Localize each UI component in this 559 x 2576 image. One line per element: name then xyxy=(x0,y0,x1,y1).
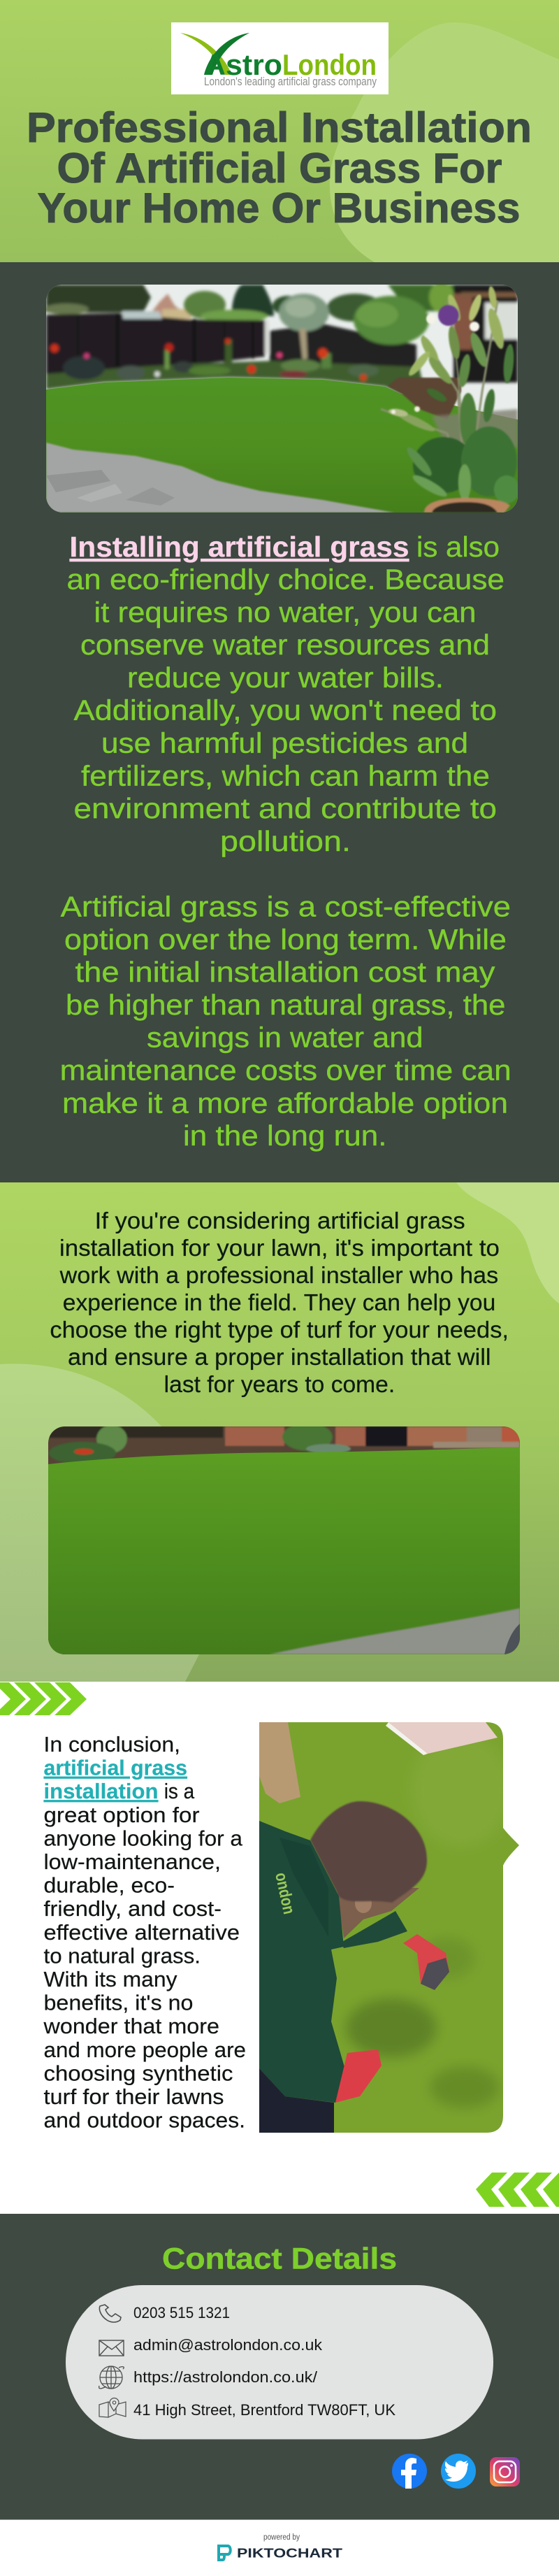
icon: instagram xyxy=(490,2457,520,2486)
text block: considering installation: experience in the field. They can help you xyxy=(63,1289,495,1315)
text: website: https://astrolondon.co.uk/ xyxy=(133,2368,318,2386)
text block: cost-effective: the initial installation cost may xyxy=(75,956,495,988)
footer: powered by Piktochart xyxy=(219,2533,342,2561)
header band xyxy=(0,0,559,262)
text block: conclusion: and outdoor spaces. xyxy=(43,2108,245,2133)
text block: eco-friendly choice xyxy=(67,531,504,857)
flower bed xyxy=(46,361,426,399)
icon: globe xyxy=(99,2366,124,2389)
footer: powered by Piktochart: powered by xyxy=(263,2533,300,2542)
icon: map xyxy=(99,2398,126,2417)
white panel: conclusion xyxy=(0,1682,559,2214)
dark panel: eco-friendly and cost-effective xyxy=(0,262,559,1182)
text block: conclusion: to natural grass. xyxy=(43,1943,201,1968)
title: Your Home Or Business xyxy=(38,185,521,231)
text block: conclusion: friendly, and cost- xyxy=(43,1896,222,1921)
text block: cost-effective: savings in water and xyxy=(147,1022,423,1054)
sub-element: wooden post xyxy=(259,1722,300,1803)
text block: conclusion: wonder that more xyxy=(43,2014,219,2038)
text block: considering installation xyxy=(50,1208,509,1397)
text block: cost-effective: Artificial grass is a cost-effective xyxy=(61,891,511,923)
fences xyxy=(46,313,265,374)
text block: conclusion xyxy=(43,1732,246,2133)
text block: eco-friendly choice: is also xyxy=(416,531,500,563)
photo: lawn close-up with brick wall xyxy=(48,1423,520,1654)
sub-element: hoodie lettering: ondon xyxy=(271,1871,298,1916)
text block: eco-friendly choice: Additionally, you won't need to xyxy=(74,694,497,727)
text block: conclusion: and more people are xyxy=(43,2038,246,2062)
icon: phone xyxy=(99,2305,121,2322)
title: Professional Installation xyxy=(27,104,532,151)
text block: conclusion: durable, eco- xyxy=(43,1873,175,1898)
sub-element: trousers xyxy=(259,2068,334,2133)
text block: considering installation: last for years to come. xyxy=(164,1371,395,1397)
link: artificial grass installation xyxy=(43,1756,187,1803)
text block: considering installation: installation for your lawn, it's important to xyxy=(59,1235,500,1261)
logo: AstroLondon: London's leading artificial grass company xyxy=(204,75,377,88)
text block: considering installation: choose the right type of turf for your needs, xyxy=(50,1317,509,1343)
text block: considering installation: work with a professional installer who has xyxy=(59,1262,498,1288)
icon: twitter xyxy=(441,2454,476,2489)
sub-element: neck and ear xyxy=(337,1888,419,1938)
text block: conclusion: anyone looking for a xyxy=(43,1826,243,1850)
link: artificial grass installation: installation xyxy=(43,1779,158,1803)
text block: conclusion: In conclusion, xyxy=(43,1732,180,1756)
text block: cost-effective: option over the long term. While xyxy=(64,923,507,955)
text block: eco-friendly choice: fertilizers, which can harm the xyxy=(81,759,490,792)
text block: eco-friendly choice: conserve water resources and xyxy=(80,629,490,661)
text block: cost-effective xyxy=(60,891,511,1152)
lawn xyxy=(46,378,518,513)
text: address: 41 High Street, Brentford TW80FT, UK xyxy=(133,2401,395,2419)
green panel: professional installer xyxy=(0,1182,559,1682)
sub-element: glove right hand xyxy=(403,1934,449,1990)
patio xyxy=(46,443,394,513)
text: phone: 0203 515 1321 xyxy=(133,2304,230,2321)
sub-element: glove left hand xyxy=(335,2049,382,2103)
text block: conclusion: effective alternative xyxy=(43,1920,240,1945)
sub-element: hair xyxy=(310,1801,427,1903)
text block: cost-effective: in the long run. xyxy=(183,1119,387,1152)
olive tree xyxy=(279,294,329,331)
text block: conclusion: benefits, it's no xyxy=(43,1991,193,2015)
title: Of Artificial Grass For xyxy=(57,145,502,192)
text block: eco-friendly choice: reduce your water bills. xyxy=(127,661,444,694)
text block: conclusion: low-maintenance, xyxy=(43,1849,221,1874)
contact card xyxy=(66,2285,493,2439)
text block: conclusion: turf for their lawns xyxy=(43,2084,224,2109)
text block: eco-friendly choice: an eco-friendly choice. Because xyxy=(67,564,504,596)
icon: facebook xyxy=(392,2454,427,2489)
photo: installer working on turf xyxy=(259,1722,519,2133)
photo: garden lawn with black fence xyxy=(44,282,519,513)
green bush xyxy=(354,296,429,345)
background trees and house xyxy=(46,285,151,313)
logo: AstroLondon xyxy=(171,22,389,94)
text block: considering installation: and ensure a proper installation that will xyxy=(68,1344,491,1370)
sub-element: sleeve xyxy=(341,1911,407,1948)
logo: AstroLondon: London xyxy=(282,48,377,81)
link: artificial grass installation: artificial grass xyxy=(43,1756,187,1780)
text block: considering installation: If you're considering artificial grass xyxy=(95,1208,465,1233)
text block: eco-friendly choice: use harmful pesticides and xyxy=(101,727,468,759)
text block: cost-effective: be higher than natural grass, the xyxy=(66,989,506,1021)
heading: contact details: Contact Details xyxy=(162,2242,397,2275)
sub-element: hoodie xyxy=(259,1821,349,2103)
sub-element: shrub in pot xyxy=(381,285,519,513)
text: email: admin@astrolondon.co.uk xyxy=(133,2336,323,2354)
icon: mail xyxy=(99,2340,124,2356)
text block: cost-effective: maintenance costs over time can xyxy=(60,1054,511,1087)
sub-element: bag xyxy=(389,1722,498,1754)
dark panel: contact details xyxy=(0,2214,559,2520)
logo: AstroLondon: Astro xyxy=(204,48,282,81)
text block: eco-friendly choice: environment and contribute to xyxy=(74,792,497,824)
footer: powered by Piktochart: PIKTOCHART xyxy=(237,2547,342,2561)
text block: cost-effective: make it a more affordable option xyxy=(62,1087,508,1119)
arrows: chevrons pointing right xyxy=(0,1682,87,1715)
text block: conclusion: choosing synthetic xyxy=(43,2061,233,2085)
text block: eco-friendly choice: pollution. xyxy=(220,825,351,857)
text block: conclusion: With its many xyxy=(43,1967,177,1991)
link: Installing artificial grass: Installing artificial grass xyxy=(70,531,409,563)
arrows: chevrons pointing left xyxy=(476,2173,559,2207)
text block: conclusion: great option for xyxy=(43,1803,200,1827)
title xyxy=(27,104,532,231)
text block: conclusion: is a xyxy=(164,1779,195,1803)
text block: eco-friendly choice: it requires no water, you can xyxy=(94,596,477,628)
icon: piktochart mark xyxy=(219,2546,231,2560)
